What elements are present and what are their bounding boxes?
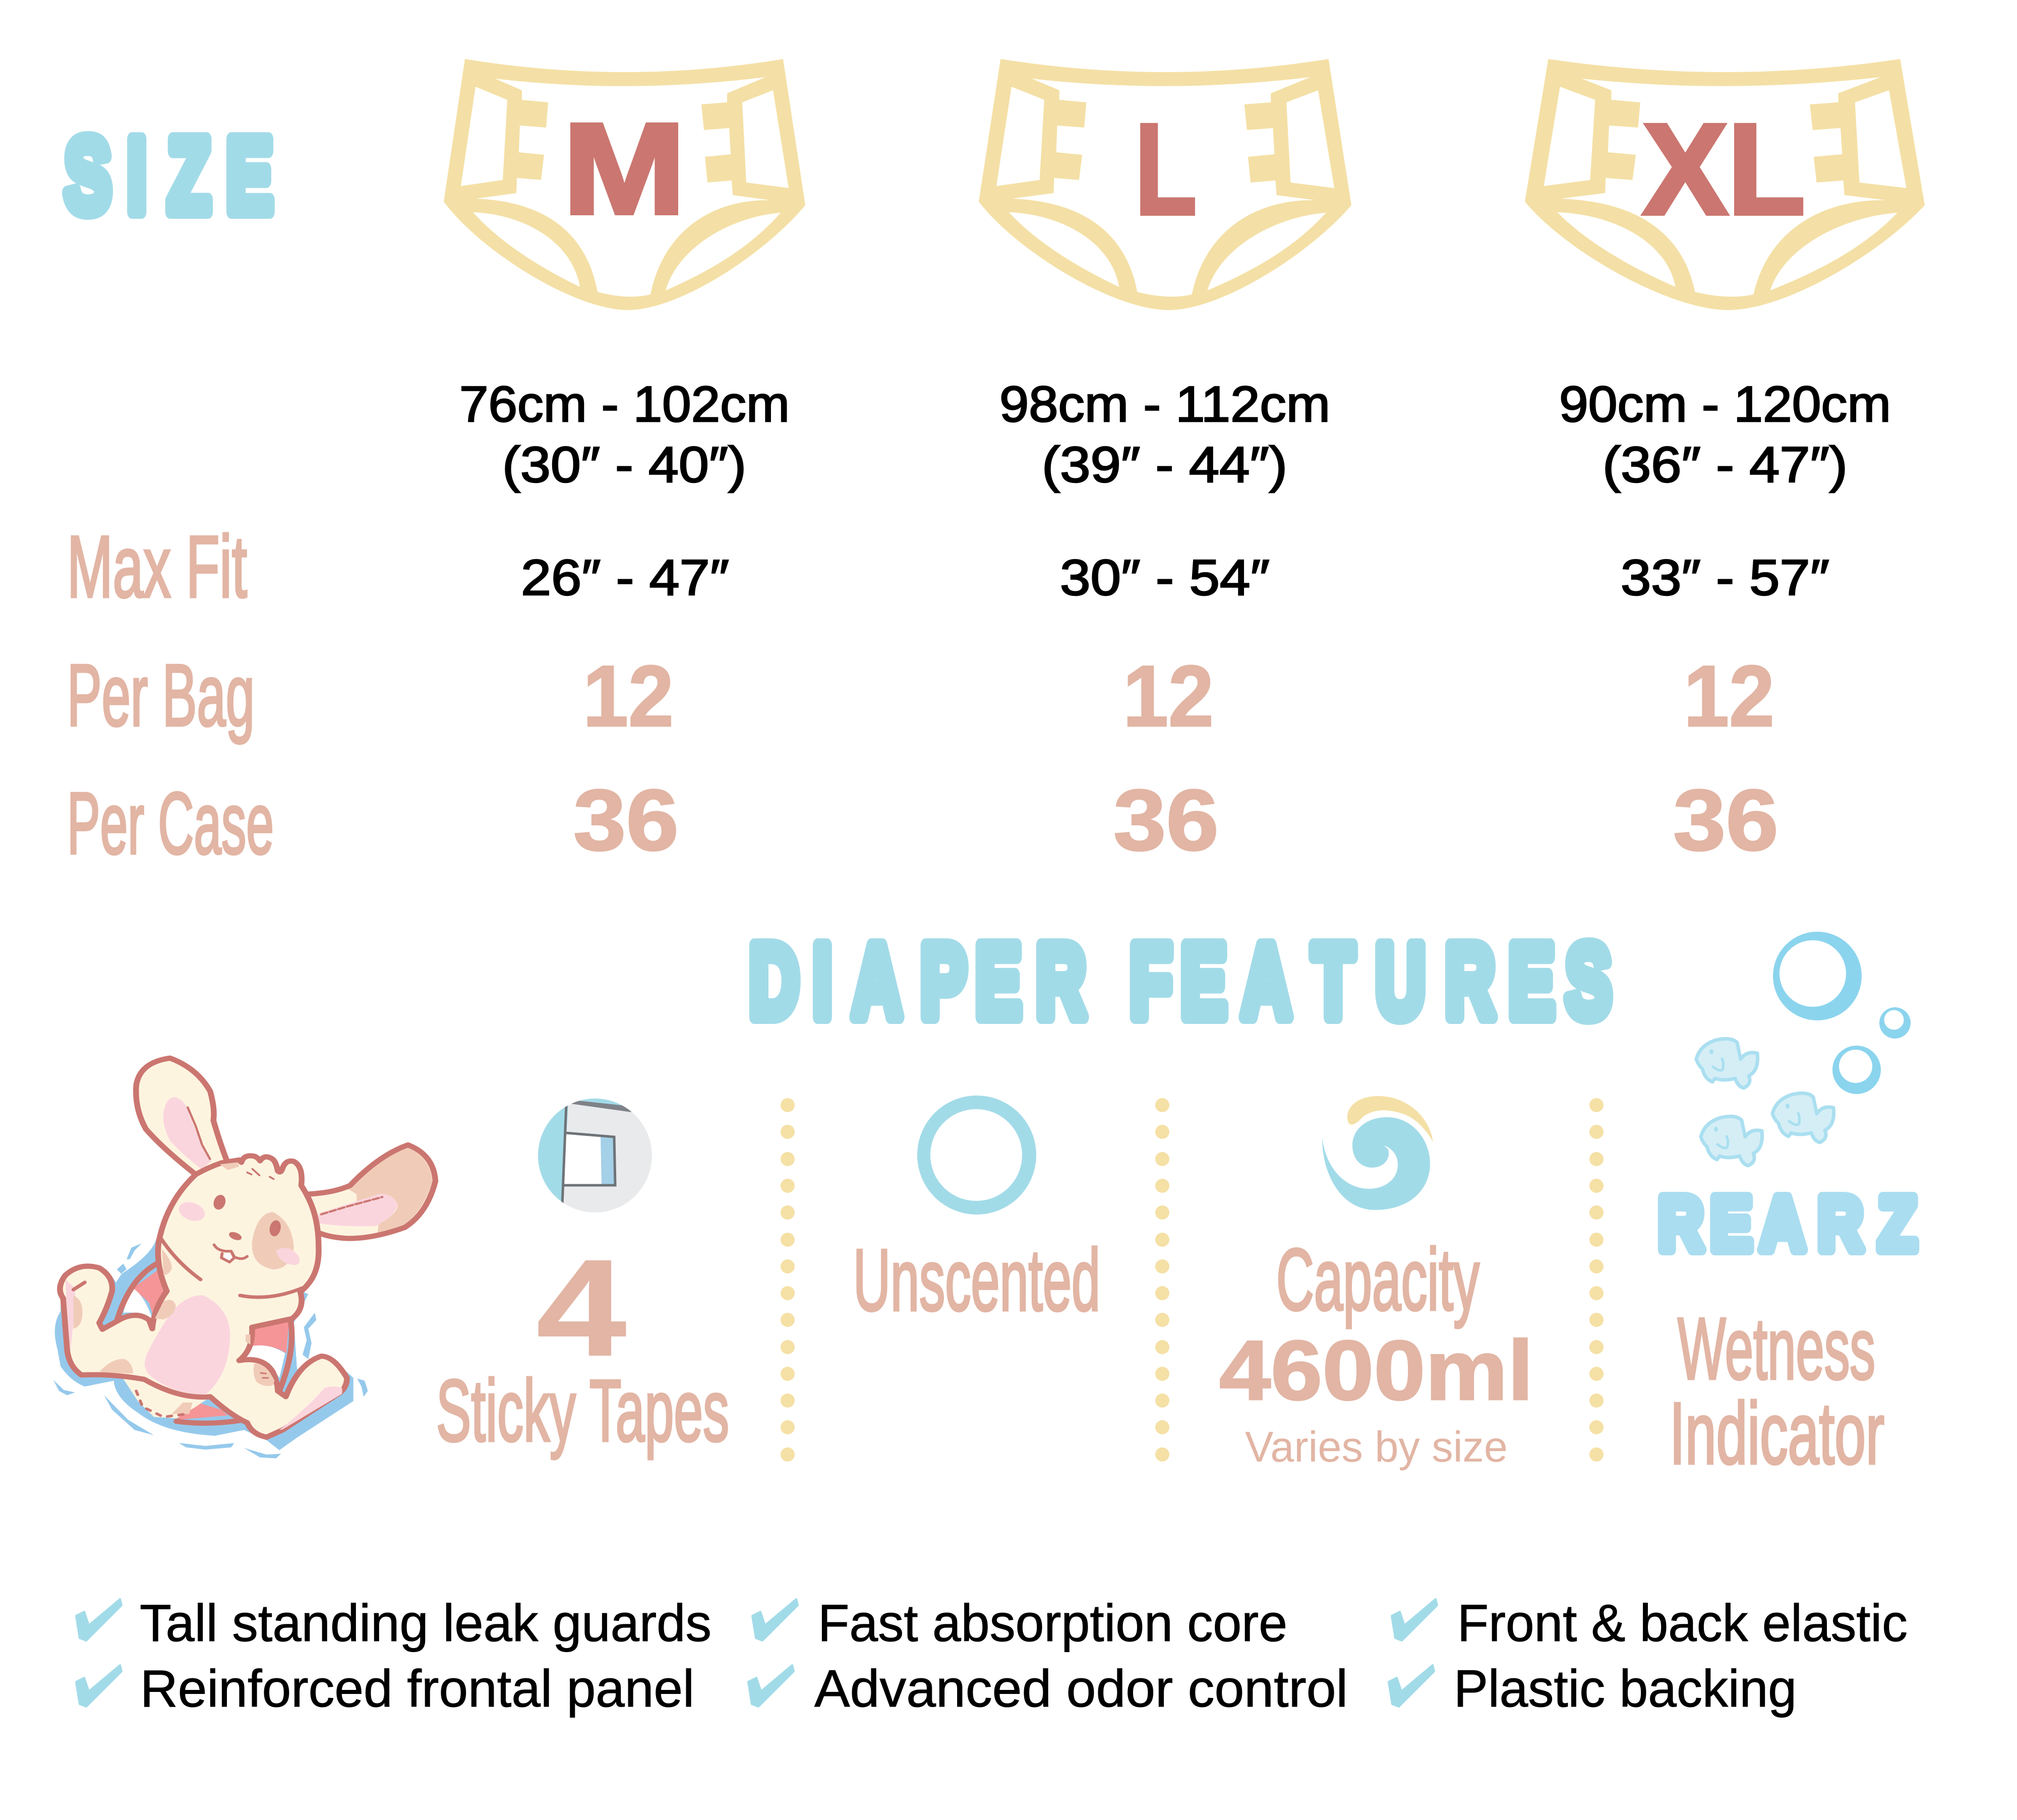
per case values: 36	[1113, 772, 1219, 869]
waist measure: M: (30″ - 40″)	[502, 437, 746, 493]
label: Unscented: Unscented	[853, 1231, 1100, 1329]
feature: wetness indicator: Indicator	[1670, 1384, 1884, 1482]
divider dots 1	[781, 1098, 795, 1462]
text: frontal panel: Reinforced frontal panel	[140, 1660, 694, 1718]
per case values: 36	[573, 772, 679, 869]
icon: tape	[538, 1099, 652, 1212]
checklist column 1	[76, 1594, 711, 1718]
heading: DIAPER FEATURES: DIAPERFEATURES	[749, 923, 1612, 1039]
text: plastic backing: Plastic backing	[1454, 1660, 1797, 1718]
bunny markings	[66, 1162, 342, 1430]
check: odor control	[748, 1665, 794, 1707]
per case values	[573, 772, 1778, 869]
letters: XL: XL	[1643, 97, 1805, 241]
waist measure: XL: (36″ - 47″)	[1603, 437, 1848, 493]
feature: unscented	[853, 1096, 1100, 1329]
diaper icon: L	[979, 59, 1351, 310]
water splash	[53, 1236, 368, 1459]
icon: bubbles	[1773, 932, 1911, 1094]
waist measure: L: 98cm - 112cm	[999, 376, 1330, 433]
swim ring	[116, 1263, 292, 1423]
label: Sticky Tapes: Sticky Tapes	[436, 1361, 729, 1460]
heading: SIZE: SIZE	[65, 116, 273, 234]
waist measure: XL	[1559, 376, 1891, 493]
divider dots 3	[1589, 1098, 1604, 1462]
text: odor control: Advanced odor control	[814, 1660, 1348, 1718]
bunny body outline	[60, 1156, 347, 1437]
feature: wetness indicator: Wetness	[1678, 1299, 1875, 1398]
waist measure: M	[459, 376, 790, 493]
waist measure: M: 76cm - 102cm	[459, 376, 790, 433]
row label: Max Fit: Max Fit	[67, 517, 247, 616]
label: Capacity: Capacity	[1276, 1230, 1479, 1328]
check: plastic backing	[1389, 1665, 1434, 1707]
icon: swirl	[1322, 1096, 1433, 1210]
letter: L: L	[1135, 97, 1197, 241]
row label: Per Case: Per Case	[67, 774, 274, 872]
illustration: bunny on swim ring	[53, 1058, 435, 1459]
feature: sticky tapes	[436, 1094, 729, 1460]
number: 4: 4	[537, 1231, 627, 1384]
check: absorption core	[752, 1599, 798, 1641]
checklist column 2	[748, 1594, 1348, 1718]
waist measure: L: (39″ - 44″)	[1042, 437, 1287, 493]
check: leak guards	[76, 1599, 122, 1641]
left ear	[136, 1058, 226, 1175]
per bag values: 12	[583, 648, 674, 745]
lower body	[122, 1376, 209, 1418]
diaper icon: XL	[1525, 59, 1925, 310]
icon: ring	[917, 1096, 1036, 1215]
check: frontal panel	[76, 1665, 122, 1707]
waist measure: L	[999, 376, 1330, 493]
max fit values	[521, 550, 1829, 606]
text: leak guards: Tall standing leak guards	[140, 1594, 711, 1653]
value: 4600ml: 4600ml	[1219, 1323, 1533, 1418]
row label: Per Bag: Per Bag	[67, 646, 255, 744]
bunny face	[74, 1169, 302, 1417]
note: Varies by size: Varies by size	[1245, 1423, 1508, 1471]
feature: capacity	[1219, 1096, 1533, 1471]
waist measure: XL: 90cm - 120cm	[1559, 376, 1891, 433]
logo: REARZ: REARZ	[1658, 1181, 1917, 1266]
letter: M: M	[563, 97, 686, 241]
feature: wetness indicator	[1670, 1299, 1884, 1482]
max fit values: 33″ - 57″	[1621, 550, 1829, 606]
text: absorption core: Fast absorption core	[818, 1594, 1287, 1653]
right ear	[308, 1145, 435, 1238]
divider dots 2	[1155, 1098, 1169, 1462]
diaper icon: M	[444, 59, 805, 310]
icon: fish	[1696, 1039, 1834, 1166]
text: elastic: Front & back elastic	[1457, 1594, 1908, 1653]
per bag values	[583, 648, 1774, 745]
per case values: 36	[1673, 772, 1778, 869]
per bag values: 12	[1123, 648, 1214, 745]
per bag values: 12	[1684, 648, 1774, 745]
max fit values: 30″ - 54″	[1060, 550, 1270, 606]
checklist column 3	[1389, 1594, 1908, 1718]
max fit values: 26″ - 47″	[521, 550, 729, 606]
check: elastic	[1392, 1599, 1437, 1641]
